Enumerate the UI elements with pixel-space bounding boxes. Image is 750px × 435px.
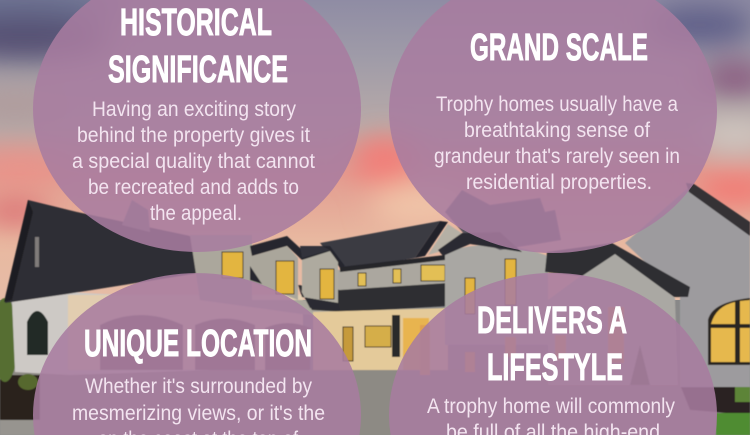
stone tower and gable — [445, 245, 548, 345]
heading: UNIQUE LOCATION — [84, 323, 312, 365]
right stucco wing — [625, 188, 750, 387]
body text — [72, 375, 325, 435]
body text: Having an exciting story — [92, 98, 296, 121]
heading — [477, 300, 627, 389]
heading: SIGNIFICANCE — [108, 49, 288, 91]
left roof — [5, 200, 205, 303]
body text: the appeal. — [150, 202, 242, 225]
sky — [0, 0, 750, 300]
body text: breathtaking sense of — [464, 119, 650, 142]
shrubs through panel — [630, 345, 650, 385]
lit lower storey — [313, 308, 448, 370]
heading: GRAND SCALE — [470, 27, 648, 69]
ground — [0, 370, 750, 435]
centre wall — [190, 235, 345, 320]
body text: grandeur that's rarely seen in — [434, 145, 680, 168]
body text: mesmerizing views, or it's the — [72, 402, 325, 425]
body text: behind the property gives it — [77, 124, 310, 147]
circle panel: historical significance — [33, 0, 361, 252]
heading: LIFESTYLE — [487, 347, 623, 389]
left white stone wing — [12, 228, 210, 375]
body text: A trophy home will commonly — [427, 395, 675, 418]
left arched window — [27, 311, 48, 355]
body text — [427, 395, 675, 435]
lower windows and door — [365, 326, 391, 347]
right big window — [708, 298, 750, 365]
heading: DELIVERS A — [477, 300, 627, 342]
wall beside tower — [428, 224, 472, 255]
body text: a special quality that cannot — [72, 150, 315, 173]
windows — [222, 252, 243, 278]
dormer roofs — [250, 236, 345, 268]
heading: HISTORICAL — [120, 2, 272, 44]
body text: be recreated and adds to — [88, 176, 299, 199]
garage arches — [100, 315, 310, 370]
body text: Trophy homes usually have a — [436, 93, 678, 116]
body text: Whether it's surrounded by — [85, 375, 312, 398]
body text: residential properties. — [466, 171, 652, 194]
circle panel: grand scale — [389, 0, 717, 253]
body text — [72, 98, 315, 225]
bushes — [0, 298, 18, 382]
heading — [108, 2, 288, 91]
circle panel: delivers a lifestyle — [389, 273, 717, 435]
upper gable seen through panel — [445, 190, 561, 250]
lower tower windows through panel — [420, 307, 624, 375]
house — [0, 183, 750, 435]
small gable behind left roof — [122, 200, 150, 232]
body text — [434, 93, 680, 194]
main roof — [320, 221, 440, 270]
circle panel: unique location — [33, 273, 361, 435]
